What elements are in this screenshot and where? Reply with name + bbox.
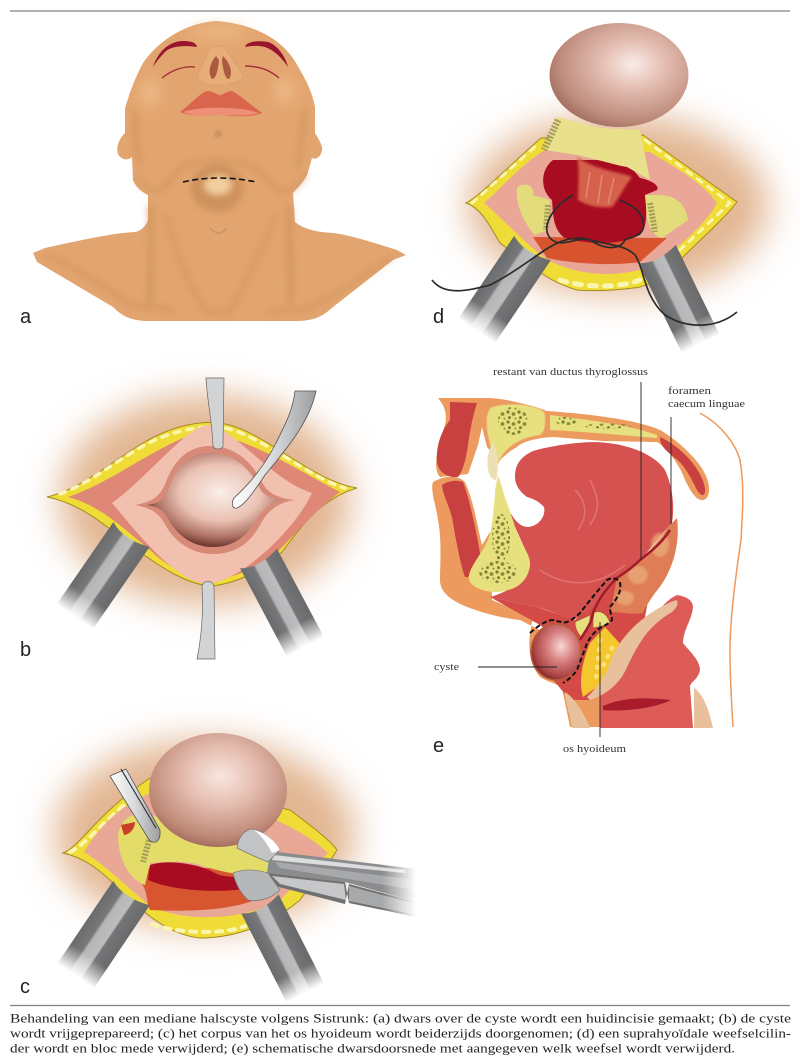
incision dashes xyxy=(183,178,256,182)
right bone stump xyxy=(645,195,688,238)
closed eyes xyxy=(162,66,279,78)
top hook xyxy=(206,378,224,449)
bone marrow stripes xyxy=(546,203,655,232)
glottis xyxy=(603,698,671,711)
suture xyxy=(432,195,737,325)
excision dashed outline xyxy=(530,578,620,683)
chin dimple xyxy=(214,130,222,138)
muscle streaks xyxy=(586,172,614,204)
floor muscle base xyxy=(490,578,685,700)
lower lip xyxy=(442,481,480,577)
bone cutter xyxy=(233,829,416,917)
incisors xyxy=(487,442,504,500)
hard palate bone xyxy=(550,415,657,438)
dark red cavity xyxy=(543,160,658,243)
panel d: suprahyoid tissue cylinder xyxy=(432,23,768,353)
label a: a xyxy=(20,306,32,328)
bone marrow cut xyxy=(143,830,152,862)
hyoid pieces xyxy=(575,612,610,637)
fat layer xyxy=(63,778,337,938)
larynx xyxy=(600,595,700,728)
red muscle patch xyxy=(121,822,135,835)
thyroglossal duct xyxy=(580,530,670,640)
tongue xyxy=(490,442,673,620)
caption: der wordt en bloc mede verwijderd; (e) schematische dwarsdoorsnede met aangegeven welk weefsel wordt verwijderd. xyxy=(10,1040,735,1056)
skin flaps xyxy=(112,425,312,584)
lips xyxy=(180,91,262,116)
head and shoulders silhouette xyxy=(33,21,406,321)
leader: os hyoideum xyxy=(599,622,601,737)
leader: cyste xyxy=(478,666,557,668)
cyst highlight xyxy=(204,175,232,195)
wound bed xyxy=(68,433,340,582)
caption xyxy=(10,1010,791,1056)
wound flaps xyxy=(484,150,717,274)
label d: d xyxy=(433,306,444,328)
leader: ductus xyxy=(640,382,642,560)
laryngeal cartilage xyxy=(587,600,678,700)
thyroid fat xyxy=(581,627,627,697)
label e: e xyxy=(433,735,444,757)
inner red rim xyxy=(135,446,295,554)
label c: c xyxy=(20,976,30,998)
label: restant van ductus thyroglossus: restant van ductus thyroglossus xyxy=(493,366,648,378)
upper jaw bone xyxy=(487,404,545,463)
label: cyste: cyste xyxy=(434,661,459,673)
caption rule xyxy=(10,1004,790,1006)
profile skin line xyxy=(700,413,743,727)
left retractor xyxy=(57,522,150,629)
top rule xyxy=(10,10,790,12)
left retractor xyxy=(57,881,150,988)
cyst bulge xyxy=(191,164,243,212)
hyoid bone xyxy=(118,814,285,885)
fat layer xyxy=(466,135,737,291)
cyst xyxy=(531,624,581,680)
tongue fibres xyxy=(540,480,625,583)
soft palate xyxy=(660,437,705,495)
cyst xyxy=(550,23,688,127)
label: caecum linguae: caecum linguae xyxy=(668,398,745,410)
left bone stump xyxy=(517,185,550,235)
adam's apple xyxy=(210,228,227,233)
eyebrows xyxy=(153,41,288,67)
thyroid lobules xyxy=(596,640,612,680)
mandible marrow xyxy=(479,514,517,583)
muscle floor xyxy=(533,237,667,264)
leader: foramen xyxy=(670,417,672,524)
facial and neck shading xyxy=(45,110,392,312)
fat globules xyxy=(60,427,345,494)
nose xyxy=(198,46,243,85)
skin and palate xyxy=(436,398,709,500)
caption: wordt vrijgeprepareerd; (c) het corpus van het os hyoideum wordt beiderzijds doorgenomen; (d) een suprahyoïdale weefselcilin- xyxy=(10,1026,791,1040)
fat globules xyxy=(70,800,245,932)
bottom hook xyxy=(197,582,215,659)
cyst in opening xyxy=(147,453,283,547)
chin and neck skin xyxy=(432,477,600,727)
right retractor xyxy=(241,895,324,1003)
wound flaps xyxy=(84,790,328,917)
dark red cavity xyxy=(148,862,250,891)
panel b: cyst exposed xyxy=(20,378,357,661)
fat globules right xyxy=(472,140,730,250)
skin halo xyxy=(60,395,350,605)
muscle floor xyxy=(135,868,268,911)
caption: Behandeling van een mediane halscyste volgens Sistrunk: (a) dwars over de cyste wordt een huidincisie gemaakt; (b) de cyste xyxy=(10,1010,791,1026)
fat layer xyxy=(47,422,357,586)
label b: b xyxy=(20,639,31,661)
suprahyoid muscle fan xyxy=(577,157,632,207)
marrow upper xyxy=(498,407,632,435)
tongue base xyxy=(610,518,678,614)
skin halo xyxy=(468,115,768,295)
right retractor xyxy=(638,245,720,353)
cyst xyxy=(149,733,287,847)
front cartilage xyxy=(565,692,590,728)
label: foramen: foramen xyxy=(668,385,712,397)
light cheeks xyxy=(141,26,294,108)
upper lip xyxy=(437,402,477,477)
cut end of bone xyxy=(544,120,558,150)
label: os hyoideum: os hyoideum xyxy=(563,743,626,755)
elevated hyoid xyxy=(545,117,650,180)
panel c: hyoid cut xyxy=(20,733,416,1003)
back cartilage xyxy=(694,688,713,728)
panel e: cross-section xyxy=(432,366,745,757)
skin halo xyxy=(55,740,355,930)
panel a: head with incision line xyxy=(20,21,406,328)
right retractor xyxy=(240,549,324,657)
mandible xyxy=(469,477,530,592)
tongue base tissue blobs xyxy=(616,533,669,605)
curved forceps xyxy=(232,391,316,508)
left retractor xyxy=(458,236,551,343)
fat globules xyxy=(560,280,640,286)
tweezers xyxy=(110,769,160,842)
